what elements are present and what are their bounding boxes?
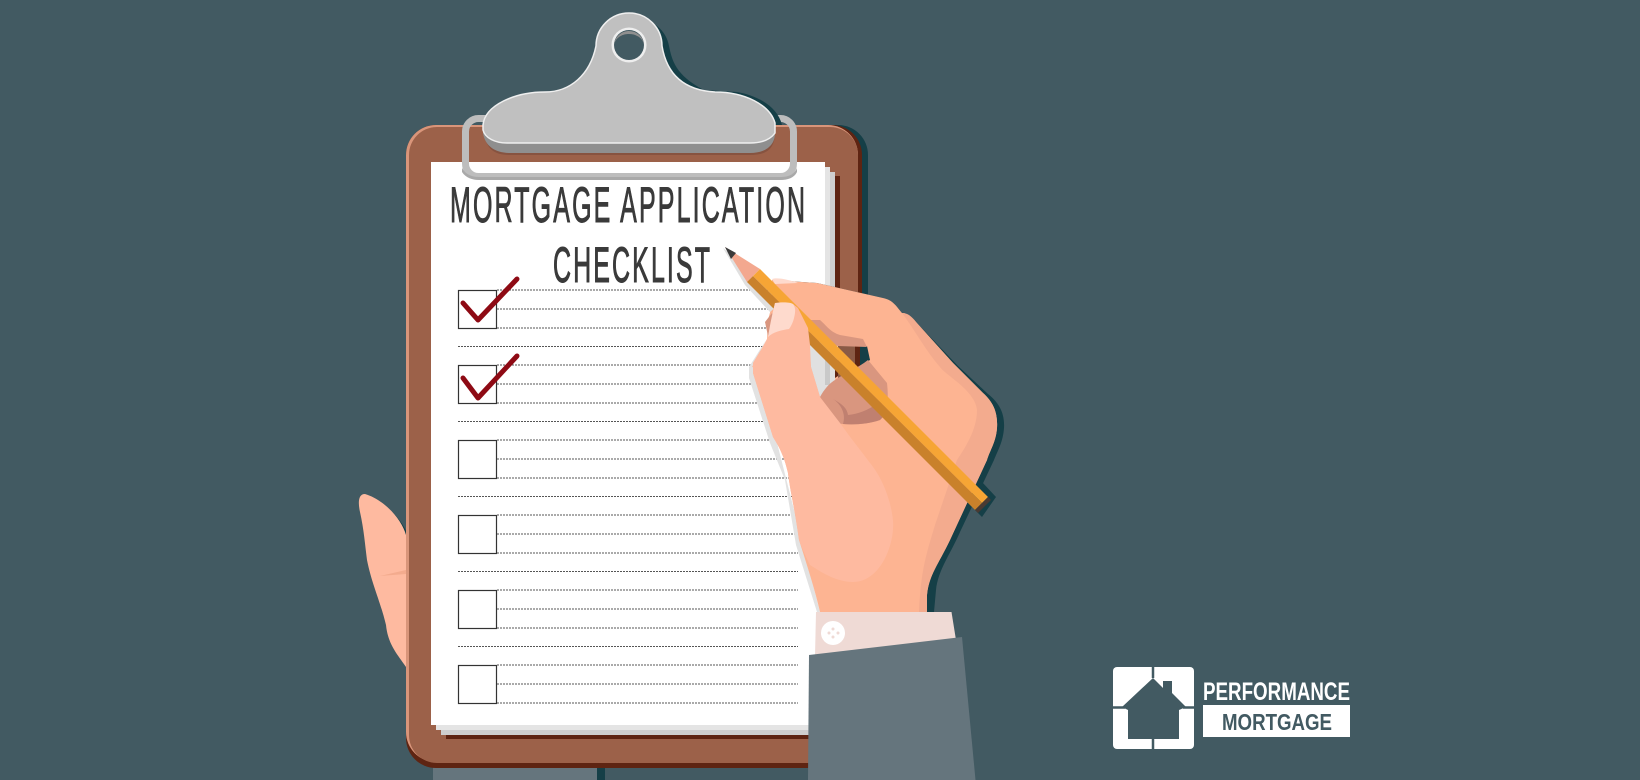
paper stack — [431, 162, 840, 739]
lighter thumb and palm — [753, 340, 893, 582]
logo wordmark: PERFORMANCE — [1203, 678, 1350, 706]
clip — [462, 13, 797, 180]
thumb over pencil — [752, 302, 811, 375]
logo — [1113, 667, 1350, 749]
logo: MORTGAGE — [1222, 709, 1332, 735]
title — [450, 178, 805, 293]
cuff — [815, 612, 956, 656]
pencil — [723, 247, 996, 517]
checkboxes — [458, 290, 496, 704]
logo mark — [1113, 667, 1194, 749]
writing hand — [749, 278, 1004, 612]
left holding hand — [359, 494, 412, 667]
lower sleeve behind clipboard — [433, 765, 605, 780]
title: CHECKLIST — [553, 238, 710, 293]
check marks — [463, 279, 517, 398]
gap between fingers — [808, 335, 870, 397]
ruled dotted lines — [458, 290, 798, 703]
clipboard — [406, 125, 868, 768]
fingertip highlight — [772, 278, 798, 284]
title: MORTGAGE APPLICATION — [450, 178, 805, 233]
suit sleeve — [808, 637, 976, 780]
shaded index finger underside — [808, 320, 867, 347]
shaded middle finger — [820, 360, 888, 424]
darker right palm edge — [902, 313, 997, 612]
